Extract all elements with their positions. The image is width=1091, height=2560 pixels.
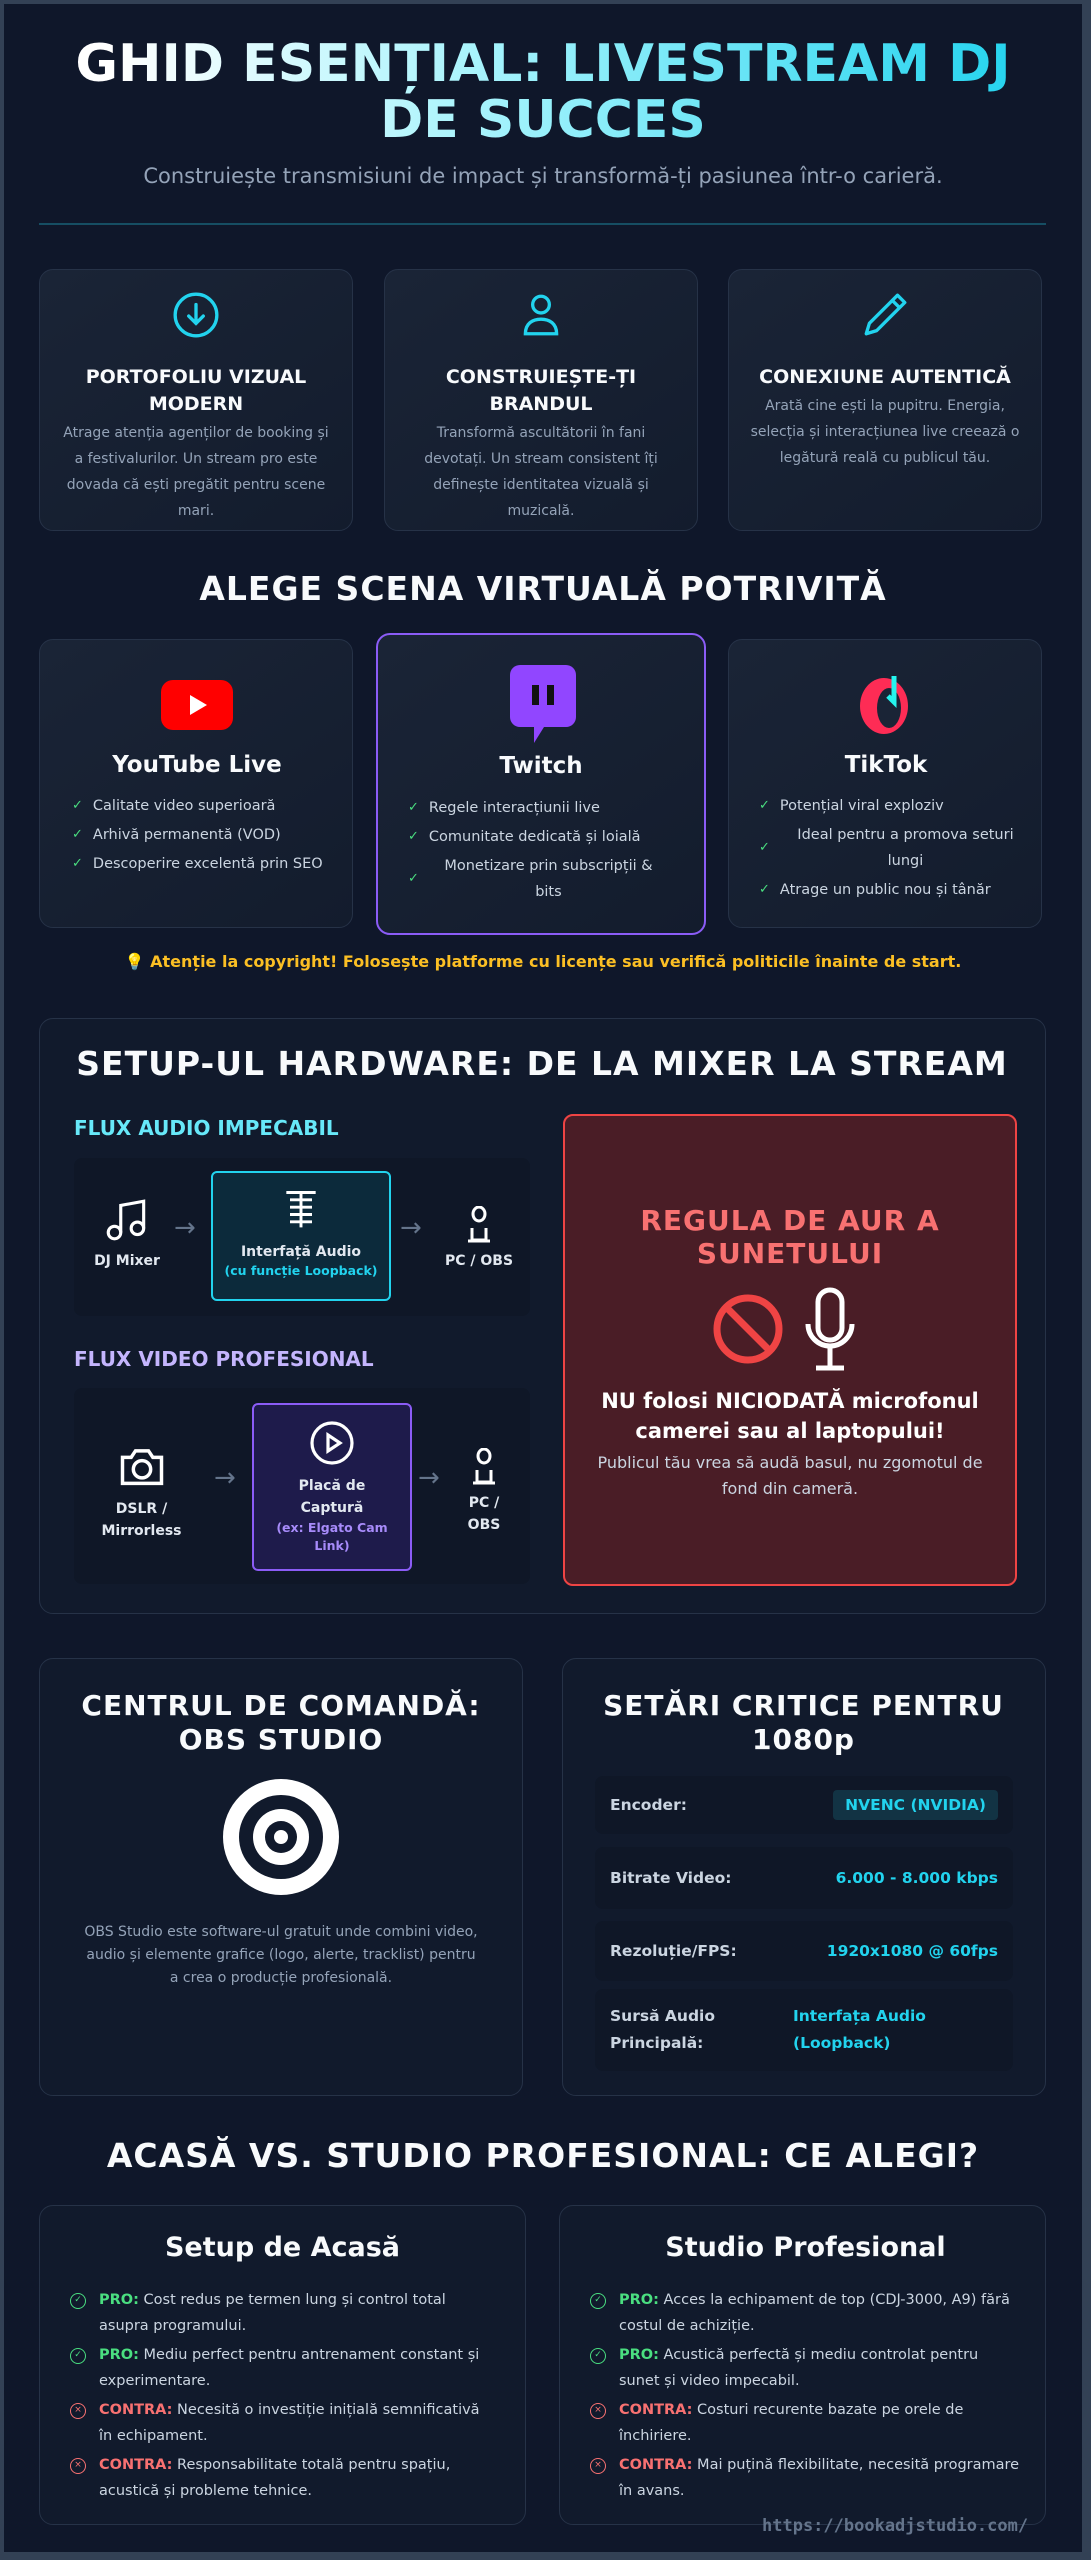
heading: obs: [81, 1689, 481, 1756]
card: twitch: ✓: [408, 871, 419, 886]
icon: camera: DSLR /: [116, 1501, 167, 1517]
title: GHID ESENȚIAL: LIVESTREAM DJ: [75, 34, 1011, 94]
card: studio: ×: [594, 2460, 602, 2470]
card: home: ✓: [74, 2295, 82, 2305]
icon: twitch: [510, 665, 576, 743]
row: bitrate: [595, 1847, 1013, 1909]
icon: no mic: [714, 1288, 854, 1370]
card: youtube: ✓: [72, 798, 83, 813]
card: studio: [559, 2205, 1046, 2525]
panel: hardware: [39, 1018, 1046, 1614]
card: twitch: Regele interacțiunii live: [429, 800, 600, 816]
callout: golden rule: Publicul tău vrea să audă basul, nu zgomotul de fond din cameră.: [597, 1453, 983, 1498]
callout: copyright: 💡 Atenție la copyright! Folosește platforme cu licențe sau verifică politicile înainte de start.: [125, 952, 961, 971]
icon: pc: [445, 1206, 513, 1269]
card: brand: BRANDUL: [489, 393, 593, 415]
card: studio: PRO: Acustică perfectă și mediu controlat pentru sunet și video impecabil.: [619, 2347, 978, 2389]
card: studio: ✓: [594, 2350, 602, 2360]
card: conexiune: Arată cine ești la pupitru. Energia, selecția și interacțiunea live creează o legătură reală cu publicul tău.: [751, 398, 1019, 466]
row: resolution: Rezoluție/FPS:: [610, 1942, 737, 1960]
arrow: →: [214, 1463, 236, 1493]
card: tiktok: ✓: [759, 882, 770, 897]
card: tiktok: Potențial viral exploziv: [780, 798, 944, 814]
box: audio interface: (cu funcție Loopback): [224, 1263, 378, 1278]
card: conexiune: [728, 269, 1042, 531]
heading: platforms: ALEGE SCENA VIRTUALĂ POTRIVITĂ: [199, 569, 887, 608]
card: home: ✓: [74, 2350, 82, 2360]
callout: golden rule: [563, 1114, 1017, 1586]
row: audio source: (Loopback): [793, 2034, 890, 2052]
row: audio source: Interfața Audio: [793, 2007, 926, 2025]
arrow: →: [174, 1213, 196, 1243]
box: capture card: Captură: [301, 1500, 363, 1516]
card: tiktok: Ideal pentru a promova seturi lungi: [797, 827, 1014, 869]
heading: settings: [603, 1689, 1004, 1756]
card: studio: ✓: [594, 2295, 602, 2305]
row: encoder: Encoder:: [610, 1796, 687, 1814]
card: twitch: Twitch: [499, 753, 583, 779]
card: portofoliu: PORTOFOLIU VIZUAL: [86, 366, 306, 388]
box: audio interface: Interfață Audio: [241, 1244, 361, 1260]
icon: pc: OBS: [468, 1517, 500, 1533]
row: audio source: [595, 1989, 1013, 2071]
card: twitch: Monetizare prin subscripții & bits: [444, 858, 653, 900]
card: conexiune: CONEXIUNE AUTENTICĂ: [759, 366, 1011, 388]
title: DE SUCCES: [380, 90, 706, 150]
icon: pc: PC / OBS: [445, 1253, 513, 1269]
heading: video flow: FLUX VIDEO PROFESIONAL: [74, 1347, 374, 1371]
box: capture card: Link): [314, 1538, 350, 1553]
card: youtube: ✓: [72, 856, 83, 871]
card: home: PRO: Cost redus pe termen lung și control total asupra programului.: [99, 2292, 446, 2334]
card: studio: CONTRA: Costuri recurente bazate pe orele de închiriere.: [619, 2402, 963, 2444]
card: home: CONTRA: Responsabilitate totală pentru spațiu, acustică și probleme tehnice.: [99, 2457, 450, 2499]
heading: settings: 1080p: [752, 1723, 855, 1756]
subtitle: Construiește transmisiuni de impact și transformă-ți pasiunea într-o carieră.: [143, 164, 943, 188]
card: youtube: [39, 639, 353, 928]
card: home: ×: [74, 2460, 82, 2470]
icon: pc: [468, 1448, 500, 1533]
box: capture card: (ex: Elgato Cam: [276, 1520, 388, 1535]
panel: obs: [39, 1658, 523, 2096]
diagram: audio flow: [74, 1158, 530, 1316]
arrow: →: [400, 1213, 422, 1243]
box: capture card: [252, 1403, 412, 1571]
row: bitrate: Bitrate Video:: [610, 1869, 731, 1887]
row: audio source: Sursă Audio: [610, 2007, 715, 2025]
card: youtube: ✓: [72, 827, 83, 842]
box: capture card: Placă de: [299, 1478, 365, 1494]
row: audio source: Principală:: [610, 2034, 703, 2052]
card: brand: [384, 269, 698, 531]
callout: golden rule: SUNETULUI: [697, 1237, 883, 1270]
card: studio: Studio Profesional: [665, 2232, 946, 2263]
icon: pc: PC /: [469, 1495, 499, 1511]
card: portofoliu: [39, 269, 353, 531]
panel: settings: [562, 1658, 1046, 2096]
card: home: CONTRA: Necesită o investiție inițială semnificativă în echipament.: [99, 2402, 480, 2444]
row: bitrate: 6.000 - 8.000 kbps: [836, 1869, 998, 1887]
icon: music note: DJ Mixer: [94, 1253, 160, 1269]
card: portofoliu: Atrage atenția agenților de booking și a festivalurilor. Un stream pro este dovada că ești pregătit pentru scene mari.: [63, 425, 329, 519]
heading: obs: OBS STUDIO: [179, 1723, 383, 1756]
icon: music note: [94, 1199, 160, 1269]
title: [4, 36, 1082, 148]
card: twitch: ✓: [408, 829, 419, 844]
arrow: →: [418, 1463, 440, 1493]
card: youtube: YouTube Live: [112, 752, 282, 778]
heading: audio flow: FLUX AUDIO IMPECABIL: [74, 1116, 339, 1140]
heading: settings: SETĂRI CRITICE PENTRU: [603, 1689, 1004, 1722]
icon: user: [524, 294, 558, 336]
card: brand: Transformă ascultătorii în fani devotați. Un stream consistent îți definește identitatea vizuală și muzicală.: [424, 425, 658, 519]
card: tiktok: [728, 639, 1042, 928]
card: tiktok: Atrage un public nou și tânăr: [780, 882, 991, 898]
callout: golden rule: NU folosi NICIODATĂ microfonul camerei sau al laptopului!: [601, 1389, 979, 1443]
icon: obs: [223, 1779, 339, 1895]
card: youtube: Descoperire excelentă prin SEO: [93, 856, 323, 872]
diagram: video flow: [74, 1388, 530, 1584]
card: tiktok: ✓: [759, 798, 770, 813]
card: tiktok: ✓: [759, 840, 770, 855]
icon: download circle: [174, 292, 218, 338]
heading: comparison: ACASĂ VS. STUDIO PROFESIONAL: CE ALEGI?: [107, 2136, 979, 2175]
card: studio: ×: [594, 2405, 602, 2415]
watermark: https://bookadjstudio.com/: [762, 2516, 1028, 2536]
card: home: PRO: Mediu perfect pentru antrenament constant și experimentare.: [99, 2347, 479, 2389]
icon: tiktok: [860, 676, 908, 734]
row: encoder: [595, 1776, 1013, 1834]
callout: golden rule: REGULA DE AUR A: [640, 1204, 940, 1237]
box: audio interface: [211, 1171, 391, 1301]
card: home: [39, 2205, 526, 2525]
card: tiktok: TikTok: [845, 752, 927, 778]
card: home: ×: [74, 2405, 82, 2415]
card: youtube: Arhivă permanentă (VOD): [93, 827, 281, 843]
card: twitch: [376, 633, 706, 935]
card: home: Setup de Acasă: [165, 2232, 400, 2263]
icon: pencil: [864, 294, 906, 336]
card: twitch: Comunitate dedicată și loială: [429, 829, 641, 845]
heading: obs: CENTRUL DE COMANDĂ:: [81, 1689, 481, 1722]
icon: camera: [101, 1449, 182, 1539]
card: studio: CONTRA: Mai puțină flexibilitate, necesită programare în avans.: [619, 2457, 1019, 2499]
card: studio: PRO: Acces la echipament de top (CDJ-3000, A9) fără costul de achiziție.: [619, 2292, 1010, 2334]
row: resolution: [595, 1921, 1013, 1981]
heading: hardware: SETUP-UL HARDWARE: DE LA MIXER LA STREAM: [76, 1044, 1008, 1083]
panel: obs: OBS Studio este software-ul gratuit unde combini video, audio și elemente grafice (logo, alerte, tracklist) pentru a crea o producție profesională.: [84, 1924, 478, 1986]
card: twitch: ✓: [408, 800, 419, 815]
card: portofoliu: MODERN: [149, 393, 243, 415]
card: youtube: Calitate video superioară: [93, 798, 275, 814]
icon: camera: Mirrorless: [101, 1523, 182, 1539]
icon: youtube: [161, 680, 233, 730]
row: resolution: 1920x1080 @ 60fps: [827, 1942, 998, 1960]
row: encoder: NVENC (NVIDIA): [845, 1796, 986, 1814]
card: brand: CONSTRUIEȘTE-ȚI: [446, 366, 636, 388]
